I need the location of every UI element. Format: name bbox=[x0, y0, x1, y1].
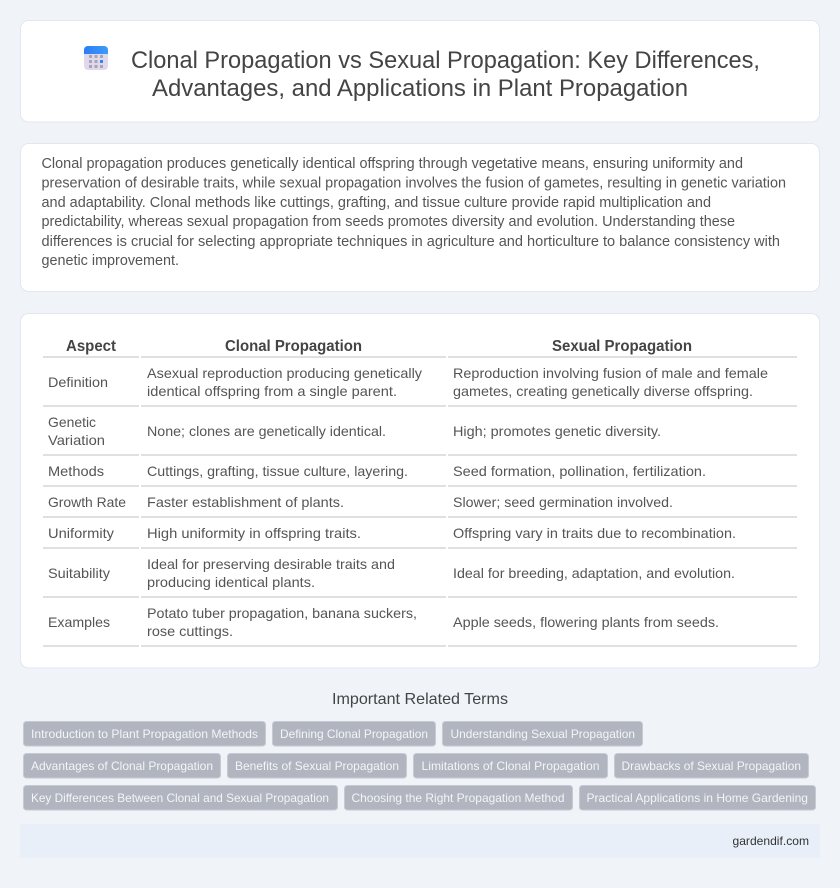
row: definition: Asexual reproduction producing genetically bbox=[147, 365, 422, 381]
footer bbox=[20, 824, 820, 858]
row: methods: Seed formation, pollination, fertilization. bbox=[453, 463, 706, 479]
row: suitability: Ideal for breeding, adaptation, and evolution. bbox=[453, 565, 735, 581]
row: genetic variation bbox=[43, 414, 797, 456]
row: growth rate: Faster establishment of plants. bbox=[147, 494, 344, 510]
related terms tags: Limitations of Clonal Propagation bbox=[422, 759, 600, 773]
table header row: Aspect bbox=[66, 338, 116, 355]
row: genetic variation: High; promotes genetic diversity. bbox=[453, 423, 661, 439]
related terms tags: Benefits of Sexual Propagation bbox=[235, 759, 399, 773]
related terms tags: Understanding Sexual Propagation bbox=[450, 727, 635, 741]
row: examples bbox=[43, 605, 797, 647]
intro paragraph: preservation of desirable traits, while sexual propagation involves the fusion of gametes, resulting in genetic variation bbox=[42, 176, 786, 192]
intro paragraph: predictability, whereas sexual propagation from seeds promotes diversity and evolution. Understanding these bbox=[42, 214, 735, 230]
related terms tags: Defining Clonal Propagation bbox=[280, 727, 428, 741]
header panel bbox=[20, 20, 820, 122]
intro paragraph: differences is crucial for selecting appropriate techniques in agriculture and horticulture to balance consistency with bbox=[42, 234, 780, 250]
row: methods: Methods bbox=[48, 463, 104, 479]
footer: gardendif.com bbox=[732, 834, 809, 848]
row: methods: Cuttings, grafting, tissue culture, layering. bbox=[147, 463, 408, 479]
related terms tags: Introduction to Plant Propagation Methods bbox=[31, 727, 258, 741]
row: definition: gametes, creating genetically diverse offspring. bbox=[453, 383, 753, 399]
row: growth rate: Slower; seed germination involved. bbox=[453, 494, 673, 510]
title: Clonal Propagation vs Sexual Propagation: Key Differences, bbox=[131, 47, 760, 74]
row: uniformity: High uniformity in offspring traits. bbox=[147, 525, 361, 541]
related terms tags bbox=[24, 722, 816, 810]
row: suitability bbox=[43, 556, 797, 598]
table panel bbox=[20, 314, 820, 668]
row: examples: Potato tuber propagation, banana suckers, bbox=[147, 605, 417, 621]
row: uniformity: Offspring vary in traits due to recombination. bbox=[453, 525, 736, 541]
intro paragraph: genetic improvement. bbox=[42, 253, 179, 269]
row: examples: Apple seeds, flowering plants from seeds. bbox=[453, 614, 719, 630]
row: suitability: producing identical plants. bbox=[147, 574, 315, 590]
row: uniformity bbox=[43, 525, 797, 549]
row: definition: Definition bbox=[48, 374, 108, 390]
row: examples: Examples bbox=[48, 614, 110, 630]
related terms tags: Advantages of Clonal Propagation bbox=[31, 759, 213, 773]
title bbox=[131, 47, 760, 102]
row: suitability: Suitability bbox=[48, 565, 110, 581]
related terms tags: Drawbacks of Sexual Propagation bbox=[622, 759, 801, 773]
table header row: Clonal Propagation bbox=[225, 338, 362, 355]
table header row bbox=[43, 338, 797, 358]
related terms heading: Important Related Terms bbox=[332, 691, 508, 708]
row: definition: Reproduction involving fusion of male and female bbox=[453, 365, 768, 381]
row: genetic variation: Genetic bbox=[48, 414, 96, 430]
table header row: Sexual Propagation bbox=[552, 338, 692, 355]
related terms tags: Choosing the Right Propagation Method bbox=[352, 791, 564, 805]
row: uniformity: Uniformity bbox=[48, 525, 114, 541]
related terms tags: Practical Applications in Home Gardening bbox=[586, 791, 808, 805]
row: growth rate: Growth Rate bbox=[48, 494, 126, 510]
row: growth rate bbox=[43, 494, 797, 518]
row: methods bbox=[43, 463, 797, 487]
intro panel bbox=[20, 144, 820, 292]
intro paragraph bbox=[42, 156, 786, 269]
icon: calendar bbox=[84, 46, 108, 70]
intro paragraph: Clonal propagation produces genetically identical offspring through vegetative means, ensuring uniformity and bbox=[42, 156, 743, 172]
title: Advantages, and Applications in Plant Propagation bbox=[152, 75, 688, 102]
row: definition: identical offspring from a single parent. bbox=[147, 383, 397, 399]
intro paragraph: and adaptability. Clonal methods like cuttings, grafting, and tissue culture provide rapid multiplication and bbox=[42, 195, 711, 211]
row: definition bbox=[43, 365, 797, 407]
related terms tags: Key Differences Between Clonal and Sexual Propagation bbox=[31, 791, 329, 805]
row: genetic variation: None; clones are genetically identical. bbox=[147, 423, 386, 439]
row: suitability: Ideal for preserving desirable traits and bbox=[147, 556, 395, 572]
row: examples: rose cuttings. bbox=[147, 623, 233, 639]
row: genetic variation: Variation bbox=[48, 432, 105, 448]
